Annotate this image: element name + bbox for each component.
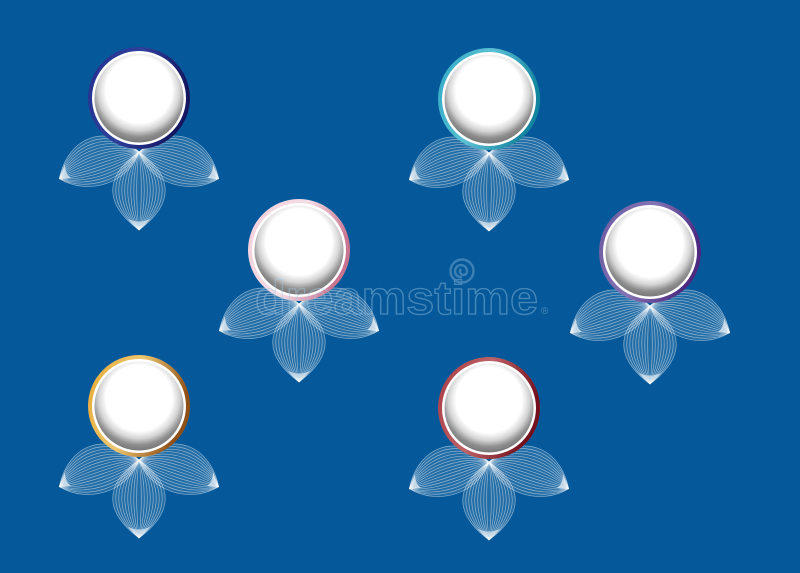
watermark registered mark: ® [541,306,549,317]
flower 1: navy ring [50,47,228,230]
white sphere [92,51,186,145]
flower 4: purple ring [561,201,739,384]
pink ring [248,199,350,301]
petals [400,126,578,231]
flower 6: red ring [400,357,578,540]
petals [561,279,739,384]
watermark wordmark: dreamstime [255,271,538,324]
white sphere [252,203,346,297]
navy ring [88,47,190,149]
white sphere [92,359,186,453]
red ring [438,357,540,459]
watermark [255,260,549,324]
white sphere [442,361,536,455]
white sphere [603,205,697,299]
watermark spiral icon [450,260,474,282]
flower 5: gold ring [50,355,228,538]
petals [210,277,388,382]
white sphere [442,52,536,146]
gold ring [88,355,190,457]
flower 3: pink ring [210,199,388,382]
purple ring [599,201,701,303]
petals [50,433,228,538]
flower 2: cyan ring [400,48,578,231]
petals [400,435,578,540]
cyan ring [438,48,540,150]
petals [50,125,228,230]
